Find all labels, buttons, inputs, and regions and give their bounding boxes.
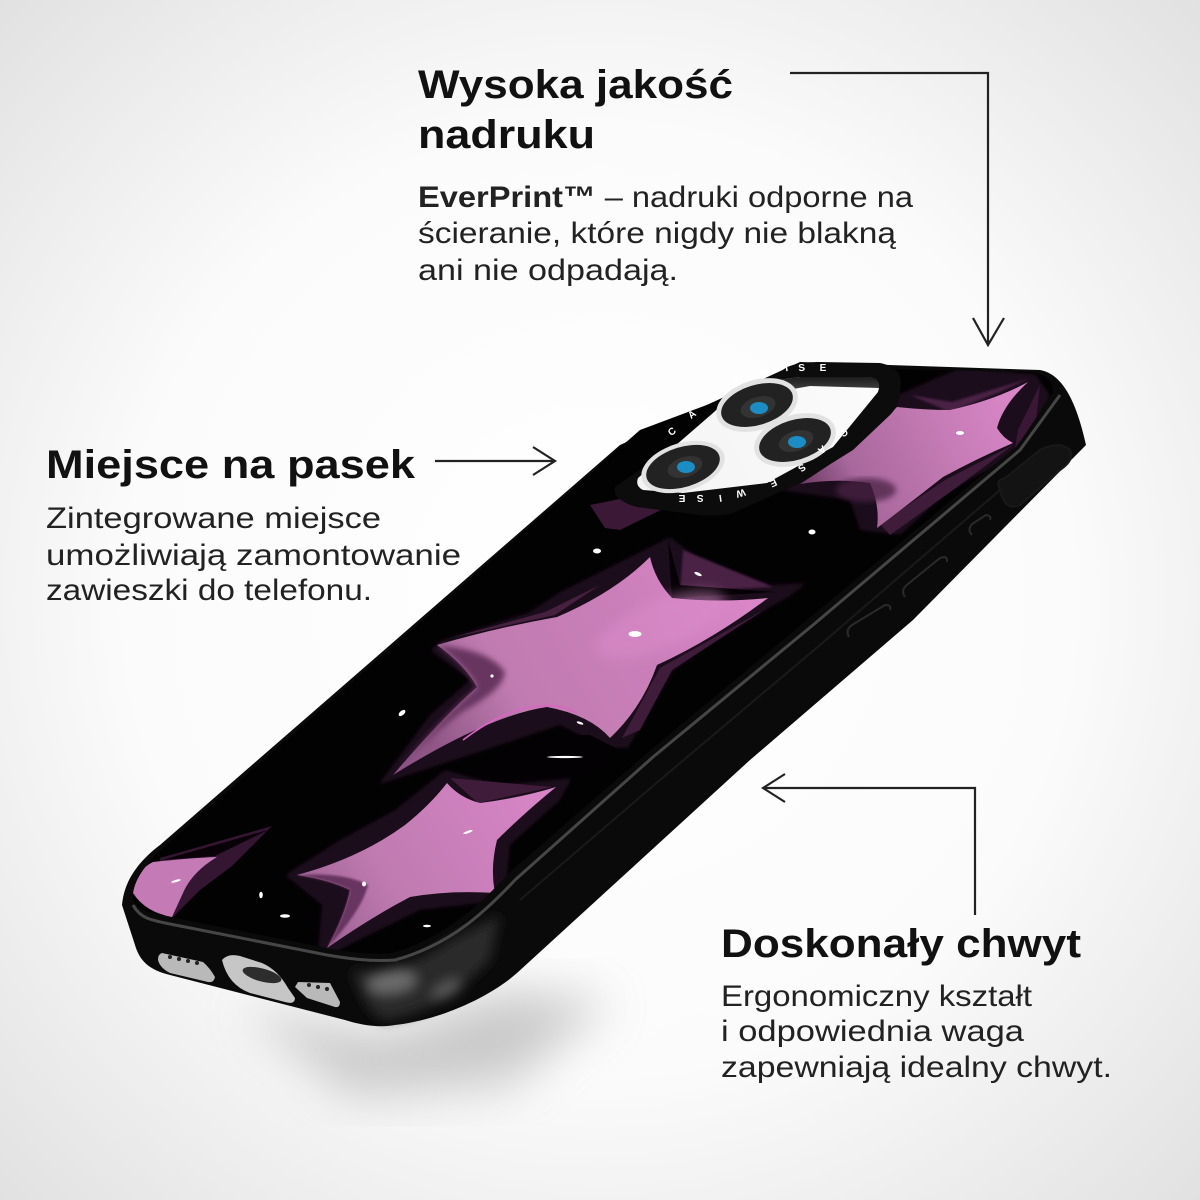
lower star body: [297, 783, 556, 948]
stars on the back: [133, 368, 1050, 952]
phone case: [122, 362, 1086, 1026]
rim lines: [133, 395, 1060, 961]
arrow: to top of case: [790, 73, 1004, 345]
body: zawieszki do telefonu.: [46, 574, 372, 607]
heading: nadruku: [418, 113, 595, 157]
brand text top: S: [798, 363, 806, 374]
top star shaded lobe: [836, 478, 896, 502]
brand text top: [666, 363, 827, 439]
centre star relief: [378, 537, 807, 785]
body: ani nie odpadają.: [418, 254, 678, 287]
bottom ports: [158, 953, 340, 1007]
brand text bottom: E: [678, 492, 685, 503]
mute switch: [998, 445, 1071, 507]
brand text bottom: C: [837, 425, 850, 439]
arrow: to strap slot: [435, 447, 555, 475]
speaker holes: [168, 955, 329, 991]
centre star: [378, 537, 807, 790]
brand text top: E: [820, 363, 827, 374]
case body: [122, 362, 1086, 1026]
brand text bottom: W: [734, 486, 747, 499]
camera ring: [615, 362, 901, 516]
lens right: [748, 404, 842, 476]
drop shadow under phone: [240, 990, 610, 1095]
body: umożliwiają zamontowanie: [46, 539, 461, 572]
top star: [780, 368, 1050, 535]
brand text top: E: [732, 377, 743, 390]
camera inner recess: [743, 377, 879, 393]
heading: Doskonały chwyt: [721, 922, 1081, 966]
centre star shaded lobe: [404, 642, 508, 762]
body: [721, 980, 1112, 1084]
back face: [133, 369, 1053, 954]
centre star magenta edge: [463, 706, 577, 740]
side buttons: [848, 445, 1071, 637]
speaker left: [158, 953, 215, 982]
small star piece under camera: [590, 498, 665, 530]
brand text top: W: [759, 366, 772, 379]
brand text top: C: [666, 426, 679, 439]
brand text bottom: I: [718, 492, 722, 503]
brand text bottom: E: [767, 476, 778, 489]
body: ścieranie, które nigdy nie blakną: [418, 217, 896, 250]
heading: Wysoka jakość: [418, 63, 733, 107]
corner star: [133, 826, 272, 917]
centre star body: [393, 557, 768, 775]
brand text bottom: [678, 425, 850, 503]
callout: strap slot: [46, 443, 461, 607]
body: i odpowiednia waga: [721, 1015, 1024, 1048]
brand text bottom: S: [696, 492, 704, 503]
body: EverPrint™ – nadruki odporne na: [418, 181, 913, 214]
corner star relief: [160, 826, 272, 917]
body: zapewniają idealny chwyt.: [721, 1051, 1112, 1084]
brand text bottom: A: [815, 442, 828, 456]
body: Zintegrowane miejsce: [46, 502, 381, 535]
body: [46, 502, 461, 607]
lower star: [285, 770, 572, 952]
camera bump: [615, 362, 901, 516]
valley below centre star: [580, 735, 616, 748]
camera glass: [637, 377, 879, 493]
case corner gloss: [352, 915, 500, 1020]
callout: print quality: [418, 63, 913, 287]
body: Ergonomiczny kształt: [721, 980, 1033, 1013]
lower star shaded lobe: [297, 874, 368, 948]
corner star body: [133, 857, 217, 917]
top star relief: [780, 368, 1050, 535]
heading: Miejsce na pasek: [46, 443, 416, 487]
speaker right: [295, 982, 340, 1007]
brand text top: A: [686, 408, 699, 422]
lens left: [635, 431, 731, 503]
lower star relief: [285, 770, 572, 952]
brand text top: S: [707, 391, 719, 404]
arrow: to side grip: [763, 774, 975, 915]
brand text bottom: S: [795, 461, 807, 474]
body: [418, 181, 913, 287]
centre star sheen: [602, 584, 732, 654]
top star body: [800, 382, 1028, 528]
specular dots: [171, 431, 964, 927]
brand text top: I: [785, 363, 789, 374]
callout: grip: [721, 922, 1112, 1084]
charge port: [222, 955, 295, 1003]
lens top: [710, 369, 804, 441]
